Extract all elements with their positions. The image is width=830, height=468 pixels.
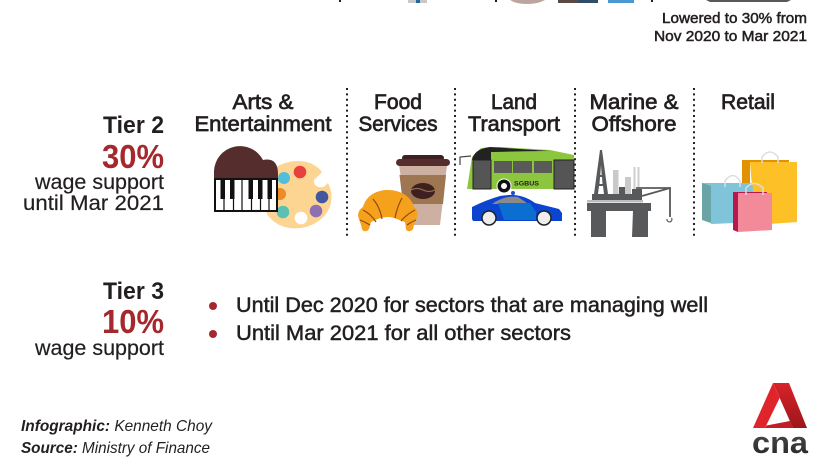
tier 3 heading: 10% [102,303,164,340]
sector: retail [702,91,797,232]
sector: arts and entertainment [194,91,332,228]
tier 3 heading: wage support [34,336,164,360]
credits [21,418,213,457]
tier 2 heading: 30% [102,138,164,175]
icon: blue car [472,191,562,225]
note: lowered rate [654,11,807,45]
icon: shopping bags [702,152,797,232]
icon: piano [214,146,278,211]
icon: coffee cup [396,155,450,225]
icon: croissant [358,190,417,231]
note: lowered rate: Nov 2020 to Mar 2021 [654,29,807,45]
tier 3 bullet list: Until Dec 2020 for sectors that are managing well [236,293,708,317]
tier 3 heading [34,278,164,360]
sector: retail: Retail [721,91,775,114]
sector: food services [358,91,450,231]
icon: green bus: SGBUS [514,182,539,188]
icon: oil rig [587,150,672,237]
credits: Infographic: Kenneth Choy [21,418,213,435]
cna logo [752,383,809,460]
tier 3 bullet list: Until Mar 2021 for all other sectors [236,321,571,345]
tier 2 heading [23,112,164,215]
sector: marine and offshore: Marine & [590,91,678,114]
sector: arts and entertainment: Arts & [232,91,294,114]
note: lowered rate: Lowered to 30% from [662,11,807,27]
sector: arts and entertainment: Entertainment [194,113,332,136]
tier 2 heading: Tier 2 [103,112,164,139]
tier 3 bullet list [209,293,708,345]
icon: palette [263,161,332,228]
sector: food services: Food [374,91,422,114]
tier 2 heading: wage support [34,170,164,194]
tier 2 heading: until Mar 2021 [23,191,164,215]
sector: land transport [460,91,574,225]
sector: food services: Services [358,113,438,136]
cropped icons at top edge [408,0,791,4]
sector: marine and offshore: Offshore [592,113,676,136]
sector: land transport: Land [491,91,537,114]
credits: Source: Ministry of Finance [21,440,210,457]
cna logo: cna [752,425,809,460]
sector: land transport: Transport [468,113,560,136]
tier 3 heading: Tier 3 [103,278,164,305]
sector: marine and offshore [587,91,678,237]
